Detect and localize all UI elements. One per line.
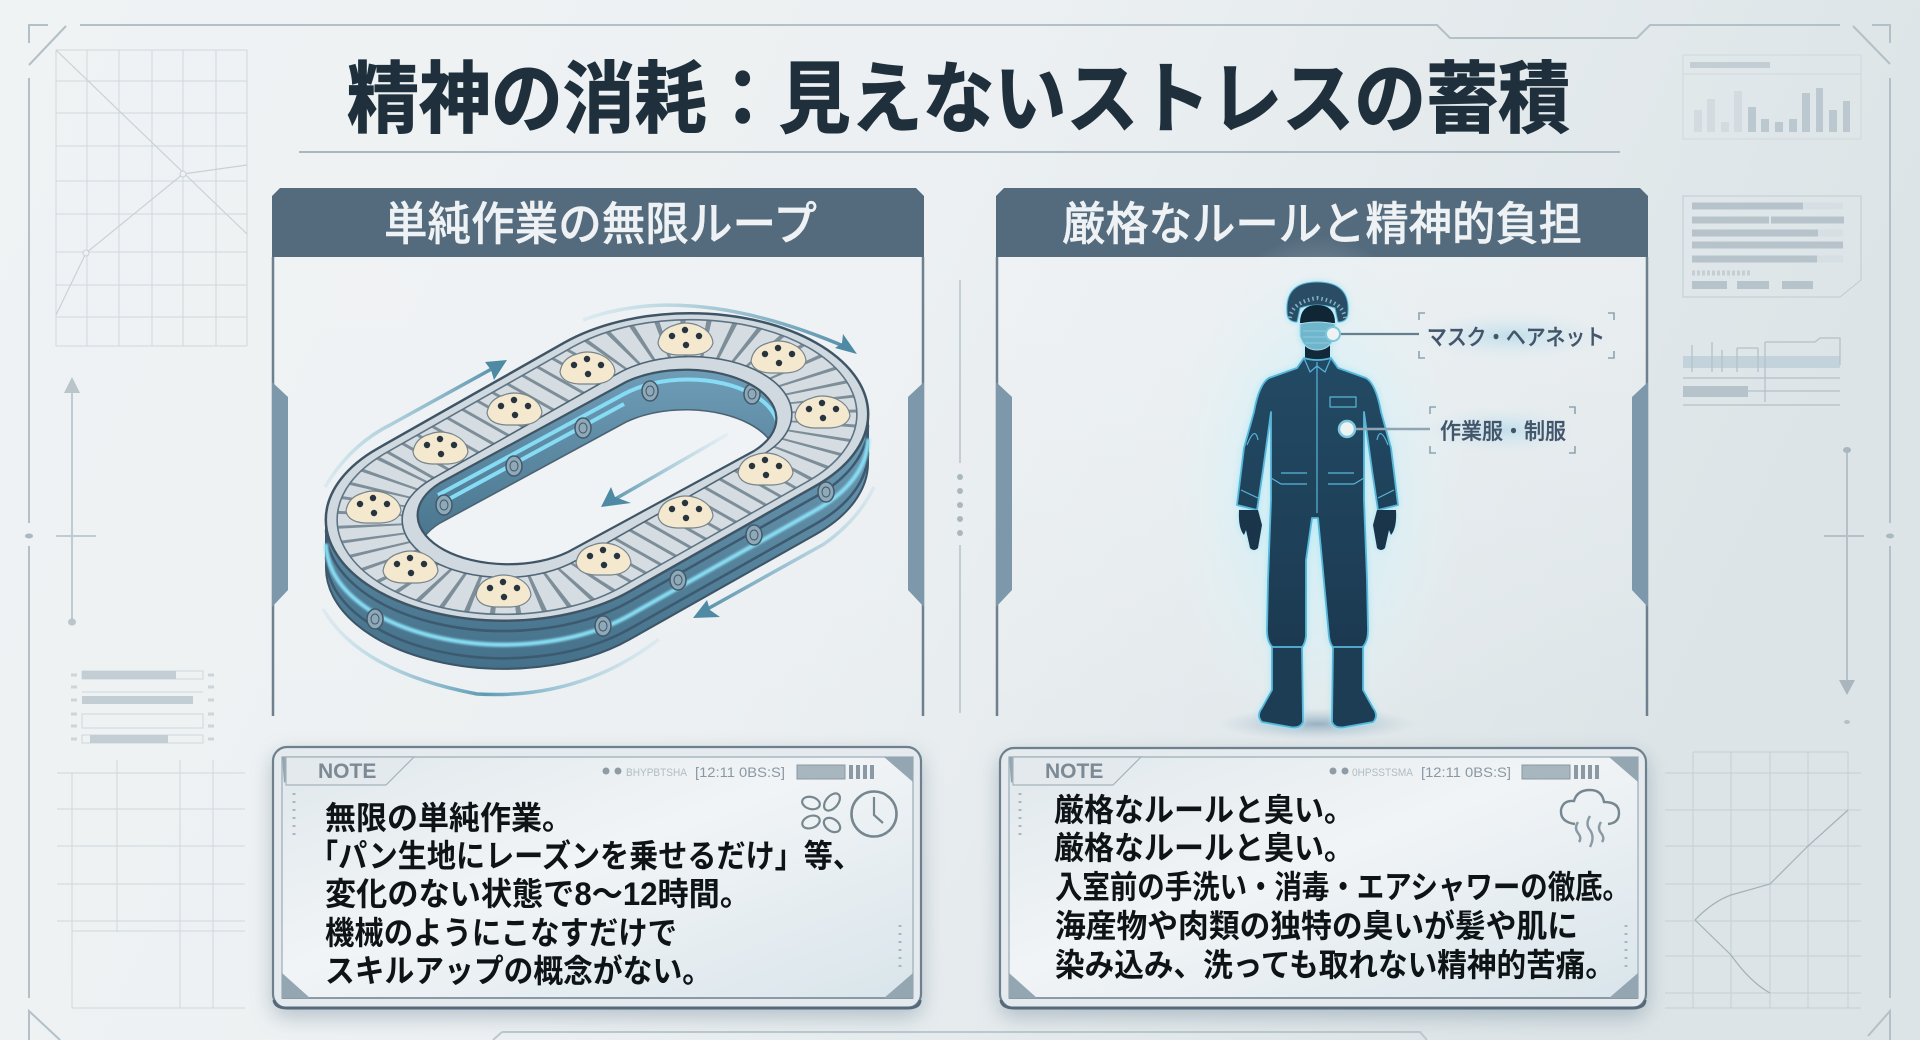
status readout: [12:11 0BS:S] [1421,764,1511,780]
status readout: 0HPSSTSMA [1352,767,1414,779]
neck [1305,345,1330,363]
status readout [602,764,872,780]
icon: dough pieces and clock [800,790,896,836]
note text: 無限の単純作業。 [325,800,573,836]
mask pleats [1303,331,1332,343]
panel header [996,188,1648,257]
left decoration: bar list [71,671,214,743]
coverall suit [1237,358,1398,650]
note card: monotonous work [273,747,921,1008]
name badge [1330,397,1356,407]
note text: 厳格なルールと臭い。 [1054,830,1354,866]
right decoration: down arrow gauge [1824,447,1864,724]
panel side rails [996,257,1648,716]
worker figure [1167,235,1467,745]
dough pieces with raisins [346,323,850,607]
conveyor inner opening [416,368,778,566]
note text [309,800,862,989]
card corner accents [1009,757,1638,998]
left decoration: up arrow gauge [56,377,96,626]
callout: mask and hairnet: マスク・ヘアネット [1427,325,1605,350]
mask [1300,322,1335,350]
callout: uniform: 作業服・制服 [1440,419,1566,444]
note label: NOTE [1045,760,1103,783]
hairnet ruffle [1290,298,1345,318]
title underline [299,151,1620,153]
note text: 入室前の手洗い・消毒・エアシャワーの徹底。 [1055,869,1630,905]
right decoration: curve chart [1665,752,1861,1008]
motion arrows [323,305,874,695]
right glove [1373,510,1396,550]
panel side rails [272,257,924,716]
left decoration: grid [57,760,245,1008]
heading: endless loop: 単純作業の無限ループ [384,198,817,250]
note text: スキルアップの概念がない。 [325,953,712,989]
suit seams [1241,358,1394,513]
note tab [286,757,414,785]
right decoration: signal widget [1683,338,1840,405]
heading: strict rules: 厳格なルールと精神的負担 [1062,198,1582,250]
note label: NOTE [318,760,376,783]
right decoration: bar chart widget [1683,55,1861,139]
note text [1054,792,1630,983]
right decoration: progress widget [1683,196,1861,297]
note text: 染み込み、洗っても取れない精神的苦痛。 [1055,947,1615,983]
left glove [1239,510,1262,550]
note tab [1013,757,1141,785]
note text: 「パン生地にレーズンを乗せるだけ」等、 [309,838,862,874]
note text: 厳格なルールと臭い。 [1054,792,1354,828]
conveyor side wall [326,414,868,669]
panel: strict rules [996,188,1648,745]
status readout: [12:11 0BS:S] [695,764,785,780]
side wall bolts [367,482,834,636]
panel: endless loop [252,188,942,716]
face shadow [1300,305,1335,323]
note card: rules and smell [1000,748,1646,1008]
callout: uniform [1339,406,1582,454]
left decoration: line chart [56,50,247,346]
conveyor illustration [322,303,876,696]
center divider [957,280,963,713]
right boot [1332,647,1376,727]
hairnet [1287,282,1348,322]
note text: 機械のようにこなすだけで [325,915,677,951]
left boot [1259,647,1303,727]
status readout: BHYPBTSHA [626,767,688,779]
callout: mask and hairnet [1326,312,1614,360]
conveyor top belt [252,271,942,663]
card corner accents [282,757,913,998]
note text: 変化のない状態で8〜12時間。 [325,876,751,912]
panel header [272,188,924,257]
status readout [1330,764,1597,780]
title: 精神の消耗：見えないストレスの蓄積 [347,55,1570,143]
icon: smell cloud [1561,790,1619,847]
note text: 海産物や肉類の独特の臭いが髪や肌に [1055,908,1578,944]
